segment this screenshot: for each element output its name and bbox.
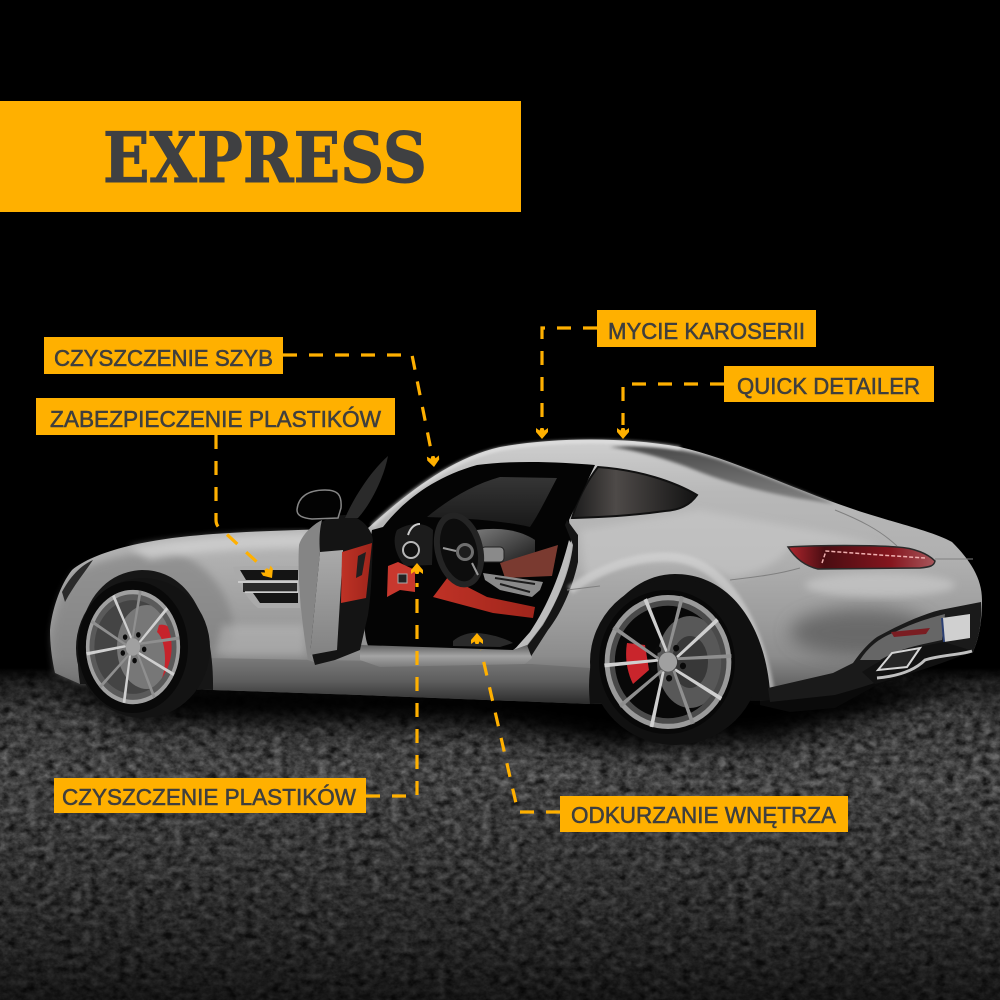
car [50,439,982,745]
lower front door highlight [215,625,305,655]
door opening [364,462,595,652]
rear shoulder lines [567,510,973,590]
callout: odkurzanie wnetrza: ODKURZANIE WNĘTRZA [571,802,837,828]
quarter window [572,467,697,518]
red knee panel [387,562,415,597]
window frame [345,456,388,518]
rear bumper shading [790,608,934,656]
callout: czyszczenie plastikow: CZYSZCZENIE PLASTIKÓW [62,784,356,810]
interior [387,477,558,647]
title banner [0,101,521,212]
callout: mycie karoserii [536,310,816,439]
rim and spokes [86,590,180,704]
door jamb rubber [524,520,578,658]
door sill [360,645,532,667]
chrome console dark [495,578,535,592]
caliper [626,643,649,684]
title text: EXPRESS [103,118,427,199]
callout: czyszczenie plastikow [54,563,423,813]
door dark pocket [356,552,366,578]
knee panel switch [398,574,407,583]
callout: quick detailer: QUICK DETAILER [737,373,920,399]
callout: czyszczenie szyb [44,337,440,468]
instrument cluster [395,524,433,566]
callout: czyszczenie szyb: CZYSZCZENIE SZYB [54,345,273,371]
brake disc [86,590,180,704]
car shadow on the ground [60,680,960,748]
centre vents [481,547,504,562]
rear reflector [891,628,930,637]
seat [453,633,513,647]
far rear tyre and underbody [760,650,975,712]
side mirror [297,490,341,519]
wheel spokes [443,548,478,575]
wheel hub [456,543,474,561]
sill [205,658,590,704]
exhaust [878,648,920,670]
front wheel arch [78,570,213,690]
brake disc [657,616,723,708]
rim and spokes [603,596,733,729]
door shell [300,515,373,665]
view through far window [427,477,557,527]
diffuser trim [877,651,972,678]
callout: zabezpieczenie plastikow: ZABEZPIECZENIE PLASTIKÓW [50,406,381,432]
valance grey band [860,614,945,660]
license plate [942,614,970,642]
headlight [62,560,93,602]
door red trim [341,543,372,603]
plate holder edge [942,618,944,642]
open door [297,456,388,665]
tyre [590,579,760,745]
red floor [433,577,535,618]
rear wheel arch light [570,557,770,690]
door jamb silver [514,540,572,650]
rear wheel arch [589,574,770,704]
gauge hood arc [408,524,420,535]
rear quarter highlight [580,510,880,580]
steering wheel [430,511,488,589]
rear wheel [590,579,760,745]
tail lamp LED strip [822,551,925,563]
diffuser [862,642,973,684]
rear lower valance [768,602,981,702]
front fender shading [52,552,233,684]
rear bumper highlight [805,573,955,597]
callout: mycie karoserii: MYCIE KAROSERII [608,318,805,344]
callout: odkurzanie wnetrza [471,633,848,832]
tail lamp [788,546,935,569]
hood highlight [130,533,308,560]
caliper [157,625,178,679]
roof edge light [372,441,680,526]
door panel [310,550,343,655]
callout: quick detailer [617,366,934,439]
door edge [299,520,322,662]
side vent [233,566,300,608]
car body [50,439,982,704]
rear glass band [610,446,835,504]
ground [0,668,1000,1000]
front wheel [76,578,210,718]
dashboard top [477,529,535,562]
gauge [403,542,419,558]
chrome console [483,573,543,597]
rear red trim [500,545,558,578]
callout: zabezpieczenie plastikow [36,398,395,581]
tyre [76,578,210,718]
